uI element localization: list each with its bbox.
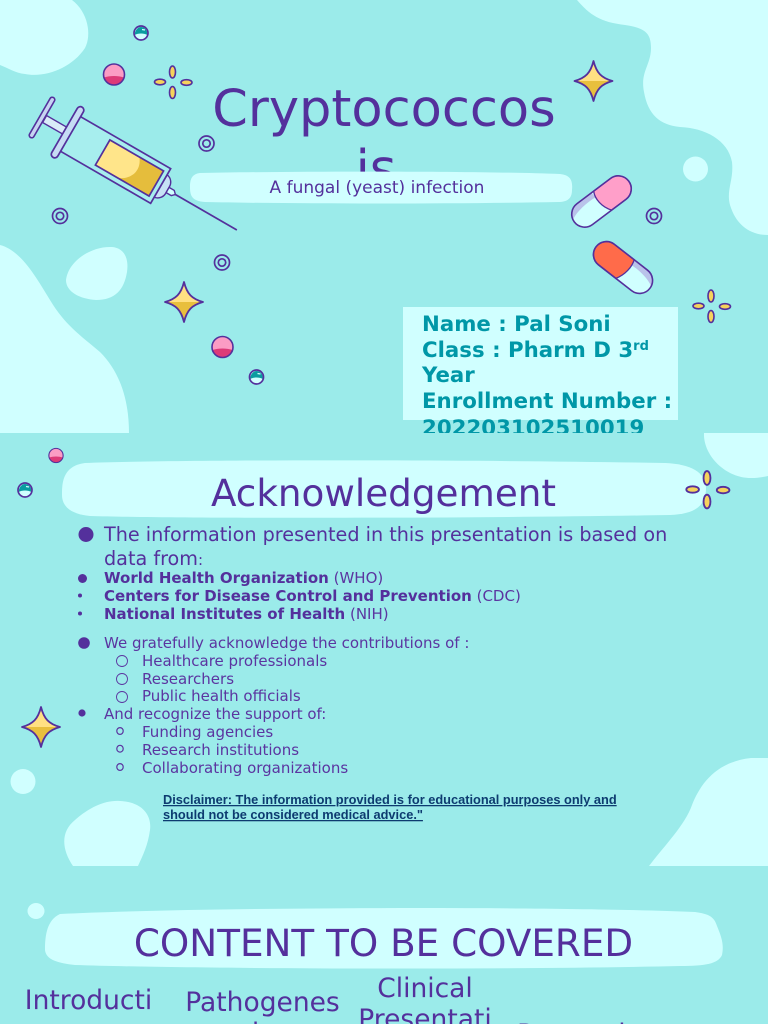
bullet list: World Health Organization (WHO) [104, 569, 383, 587]
subtitle: A fungal (yeast) infection [270, 178, 484, 198]
icons: sparkles and dots [52, 26, 730, 384]
author details: Name : Pal Soni [422, 312, 611, 337]
bullet list: Collaborating organizations [142, 759, 348, 777]
subtitle pill [190, 172, 572, 204]
background blobs: acknowledgement slide [10, 433, 768, 866]
heading: CONTENT TO BE COVERED [134, 921, 633, 965]
topic: introduction: Introducti [25, 985, 152, 1016]
title: Cryptococcos [212, 80, 556, 139]
author details: Year [421, 363, 475, 388]
disclaimer: Disclaimer: The information provided is for educational purposes only and [163, 792, 617, 807]
bullet list: We gratefully acknowledge the contributions of : [104, 634, 469, 652]
bullet list: The information presented in this presentation is based on [103, 523, 667, 546]
author details: rd [633, 339, 649, 354]
panel: contents slide [25, 903, 723, 1024]
background blobs: title slide [0, 0, 768, 433]
topic: clinical presentation: Clinical [377, 973, 473, 1004]
icon: capsule pink [570, 175, 632, 228]
bullet list: : [198, 551, 203, 569]
bullet list: National Institutes of Health (NIH) [104, 605, 389, 623]
heading pill [62, 460, 706, 518]
title: is [356, 140, 396, 199]
icon: capsule red [592, 240, 654, 294]
bullet list: Public health officials [142, 687, 301, 705]
bullet list [78, 523, 667, 777]
bullet list: Centers for Disease Control and Prevention (CDC) [104, 587, 521, 605]
bullet list: Research institutions [142, 741, 299, 759]
panel: acknowledgement slide [10, 433, 768, 866]
bullet list: Researchers [142, 670, 234, 688]
heading: Acknowledgement [211, 471, 556, 515]
bullet list: And recognize the support of: [104, 705, 326, 723]
bullet list: Healthcare professionals [142, 652, 327, 670]
icons: sparkles and dots [18, 448, 729, 747]
background dot [28, 903, 44, 919]
bullet list: Funding agencies [142, 723, 273, 741]
heading pill [45, 908, 723, 969]
panel: title slide [0, 0, 768, 441]
author details: Class : Pharm D 3 [422, 338, 633, 363]
topic: pathogenesis: Pathogenes [185, 987, 340, 1018]
author details: Enrollment Number : [422, 389, 672, 414]
author box background [403, 307, 678, 420]
icon: syringe [28, 96, 238, 231]
disclaimer: should not be considered medical advice." [163, 807, 423, 822]
author details: 202203102510019 [422, 416, 644, 441]
bullet list: data from [104, 547, 198, 570]
